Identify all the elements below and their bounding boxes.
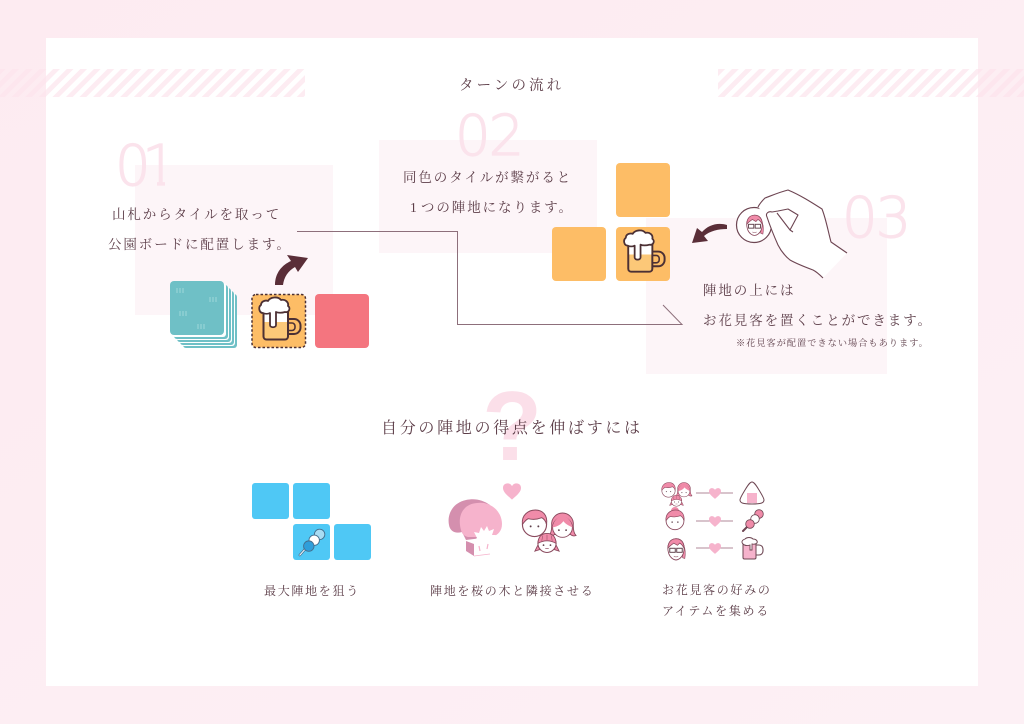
step 1 text: 公園ボードに配置します。 xyxy=(108,237,292,252)
tile deck xyxy=(170,281,237,348)
step 3 text: 陣地の上には xyxy=(703,282,795,298)
connector line between steps xyxy=(297,232,682,324)
step 2 text xyxy=(403,169,574,215)
step 3 text: ※花見客が配置できない場合もあります。 xyxy=(736,337,929,348)
header stripe left xyxy=(0,69,305,97)
caption: collect favorite items xyxy=(662,583,772,618)
caption: collect favorite items: お花見客の好みの xyxy=(662,583,772,597)
beer tile with dashed outline xyxy=(252,294,306,348)
step number 02: 02 xyxy=(455,104,522,169)
step 3 text xyxy=(703,282,933,348)
panel: step 2 background xyxy=(379,140,597,253)
step 2 text: 同色のタイルが繋がると xyxy=(403,169,572,185)
orange tile top xyxy=(616,163,670,217)
panel: step 1 background xyxy=(135,165,333,315)
step 3 text: お花見客を置くことができます。 xyxy=(703,313,933,328)
subheading: 自分の陣地の得点を伸ばすには xyxy=(381,418,643,437)
caption: largest territory: 最大陣地を狙う xyxy=(264,583,360,598)
preference row: family and rice ball xyxy=(662,482,764,506)
title: ターンの流れ xyxy=(459,77,564,94)
icon: heart xyxy=(503,483,521,500)
step number 01 xyxy=(120,143,165,186)
blue tile group with dango xyxy=(252,483,371,560)
hand holding token xyxy=(736,190,847,278)
icon: cherry tree xyxy=(449,499,502,557)
orange tile with beer xyxy=(616,227,670,281)
step 1 text xyxy=(108,206,292,252)
step 2 text: つの陣地になります。 xyxy=(421,199,574,215)
preference row: person and dango xyxy=(666,507,763,531)
question mark: ? xyxy=(482,371,542,481)
caption: next to tree: 陣地を桜の木と隣接させる xyxy=(430,583,594,598)
header stripe right xyxy=(718,69,1024,97)
panel: step 3 background xyxy=(646,218,887,374)
red tile xyxy=(315,294,369,348)
step 2 text: 1 xyxy=(410,200,419,215)
orange tile left xyxy=(552,227,606,281)
preference row: person with glasses and beer xyxy=(668,538,763,560)
step number 01: 0 xyxy=(115,134,149,199)
arrow: token placement xyxy=(692,224,727,243)
step number 01: 1 xyxy=(142,134,176,199)
arrow: up to board xyxy=(275,255,308,285)
step 1 text: 山札からタイルを取って xyxy=(112,206,281,222)
caption: collect favorite items: アイテムを集める xyxy=(662,603,770,618)
icon: family faces xyxy=(522,510,576,552)
step number 03: 03 xyxy=(842,186,909,251)
